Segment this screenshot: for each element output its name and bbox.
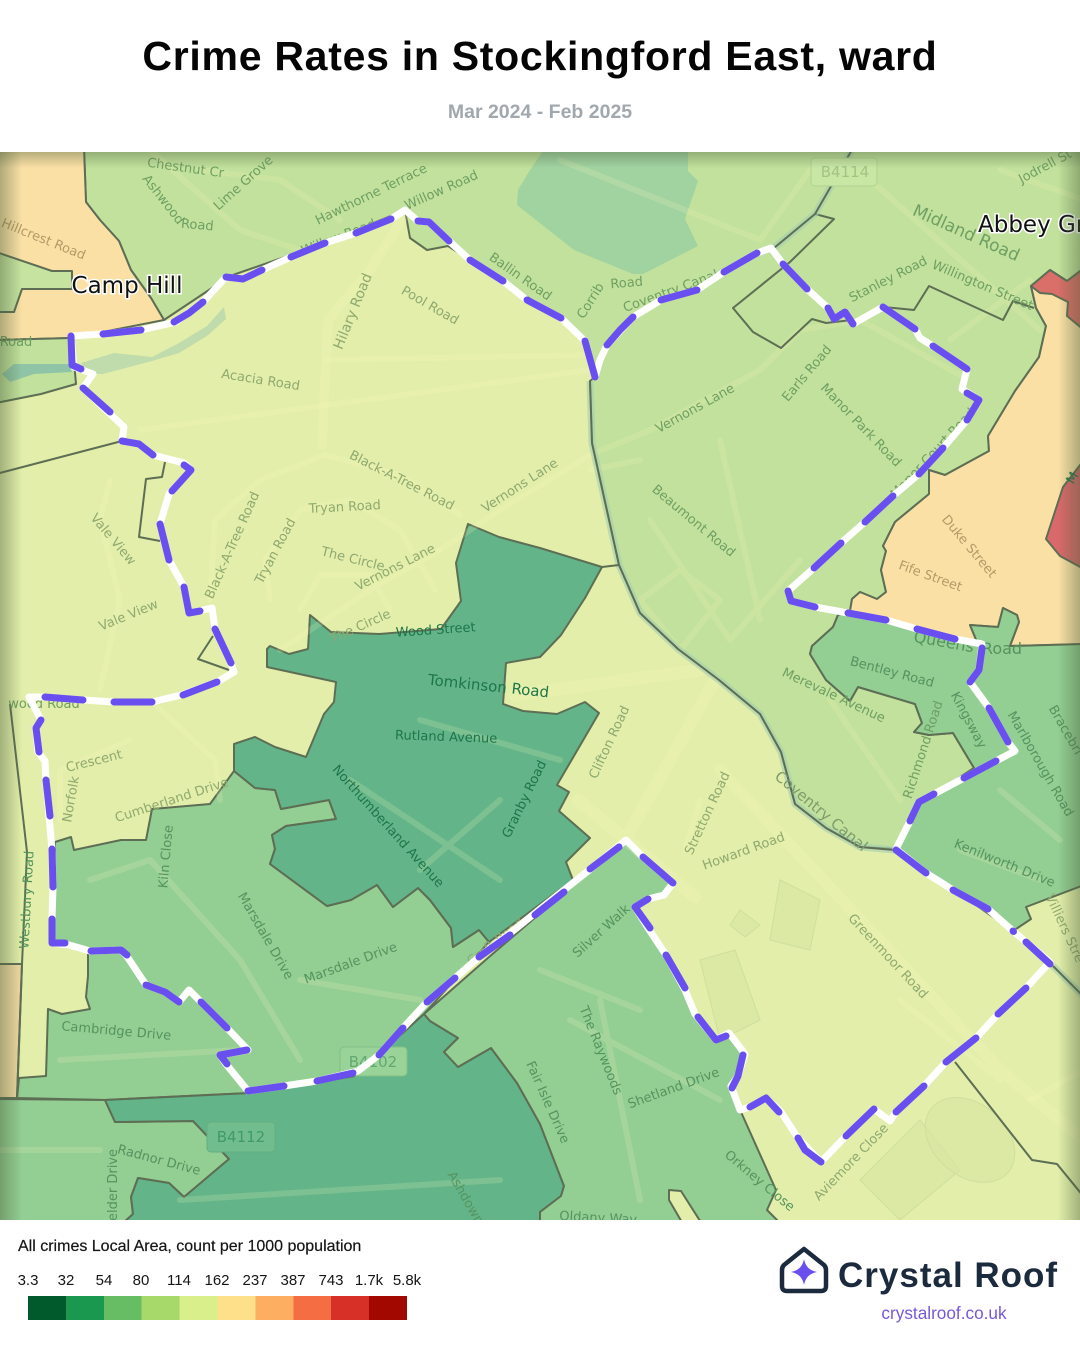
street labels: wood Road	[8, 697, 80, 712]
legend scale values: 237	[242, 1272, 268, 1289]
street labels: Tomkinson Road	[426, 671, 550, 701]
logo wordmark: Crystal Roof	[838, 1256, 1058, 1295]
street labels: Lime Grove	[211, 153, 276, 214]
title: Crime Rates in Stockingford East, ward	[142, 33, 938, 79]
base zone: light yellow-green	[0, 152, 1080, 1220]
website url: crystalroof.co.uk	[881, 1303, 1007, 1323]
zone: south-west green	[0, 1099, 229, 1224]
street labels: Rutland Avenue	[395, 728, 498, 747]
legend scale values: 1.7k	[355, 1272, 383, 1289]
street labels: Ashwood	[139, 172, 187, 228]
zone: bottom-left peach	[0, 964, 22, 1098]
street labels: The Raywoods	[575, 1003, 625, 1097]
street labels: Willington Street	[930, 258, 1035, 314]
street labels: Marsdale Drive	[302, 940, 399, 988]
legend scale values: 162	[204, 1272, 230, 1289]
street labels: Corrib	[574, 280, 608, 322]
street labels: Stanley Road	[847, 254, 930, 306]
street labels: Beaumont Road	[649, 482, 738, 560]
street labels: Road	[610, 275, 644, 292]
map: crime rate choropleth	[0, 152, 1080, 1220]
street labels: Black-A-Tree Road	[202, 490, 263, 601]
street labels: Ballin Road	[486, 250, 554, 304]
street labels: Coventry Canal	[771, 767, 871, 855]
street labels: Fife Street	[896, 558, 964, 595]
street labels: Oldany Way	[559, 1209, 638, 1228]
zone: Ashdown dark green	[105, 1014, 564, 1224]
zone: green west of ward	[0, 338, 76, 403]
zone: Tomkinson dark green	[234, 524, 602, 947]
street labels: Manor Park Road	[817, 381, 904, 470]
street labels: Road	[0, 335, 32, 350]
street labels: Stretton Road	[682, 770, 734, 857]
street labels: Kingsway	[947, 690, 989, 751]
water: brook	[2, 307, 226, 382]
street labels: The Circle	[327, 607, 393, 647]
street labels: Shetland Drive	[626, 1065, 722, 1112]
street labels: Silver Walk	[570, 901, 634, 961]
street labels: Hawthorne Terrace	[313, 161, 430, 228]
street labels: Croft Road	[464, 915, 527, 969]
street labels: Vernons Lane	[479, 456, 561, 516]
zone: Silver Walk green	[424, 840, 781, 1224]
legend title: All crimes Local Area, count per 1000 population	[18, 1238, 361, 1255]
street labels: Marlborough Road	[1004, 709, 1076, 819]
street labels: The Circle	[319, 544, 386, 575]
icon: house with star	[780, 1246, 828, 1294]
street labels: elder Drive	[106, 1149, 121, 1221]
zone: Marsdale green	[17, 771, 489, 1100]
legend scale values: 387	[280, 1272, 306, 1289]
street labels: Vale View	[97, 597, 161, 634]
legend scale values: 5.8k	[393, 1272, 421, 1289]
street labels: Queens	[912, 627, 976, 656]
street labels: Orkney Close	[721, 1148, 797, 1215]
street labels: Granby Road	[500, 758, 550, 841]
street labels: Coventry Canal	[621, 268, 720, 316]
street labels: Hilary Road	[331, 271, 376, 352]
street labels: Northumberland Avenue	[329, 762, 446, 891]
street labels: Midland Road	[909, 201, 1023, 266]
place label: Camp Hill: Camp Hill	[72, 273, 182, 299]
street labels: Aviemore Close	[811, 1121, 892, 1204]
ward boundary: purple dashes	[36, 219, 1050, 1162]
legend scale values: 32	[58, 1272, 74, 1289]
legend scale values: 54	[96, 1272, 112, 1289]
street labels: Earls Road	[780, 343, 835, 405]
zone: Queens Road and Kenilworth green	[810, 608, 1080, 931]
zone: strip west of Camp Hill	[0, 252, 72, 312]
zone: red upper	[1031, 268, 1080, 330]
zone: Camp Hill peach	[0, 148, 164, 340]
street labels: Road	[180, 217, 214, 234]
legend colour bar	[28, 1296, 407, 1320]
street labels: Ashdown	[444, 1169, 486, 1228]
legend scale values: 114	[167, 1272, 191, 1289]
street labels: Road	[982, 639, 1022, 658]
legend scale values: 80	[133, 1272, 149, 1289]
boundary lines between zones	[0, 214, 1080, 1197]
street labels: Black-A-Tree Road	[347, 448, 456, 514]
street labels: Fair Isle Drive	[522, 1059, 572, 1146]
ward boundary: white line	[29, 210, 1050, 1162]
canal	[540, 148, 1080, 997]
subtitle: date range: Mar 2024 - Feb 2025	[448, 101, 632, 123]
street labels: Tryan Road	[307, 498, 381, 517]
road number badges	[207, 158, 877, 1152]
street labels: Cumberland Drive	[113, 775, 231, 826]
street labels: Greenmoor Road	[845, 911, 931, 1002]
zone: east peach	[850, 286, 1080, 646]
street labels: Kenilworth Drive	[952, 837, 1057, 891]
street labels: Howard Road	[701, 830, 787, 874]
street labels: Tryan Road	[252, 516, 299, 588]
street labels: Cambridge Drive	[61, 1019, 172, 1044]
street labels: Hillcrest Road	[0, 216, 88, 263]
street labels: B4114	[821, 163, 869, 181]
streets: light road casing	[0, 150, 1080, 1200]
street labels: Clifton Road	[586, 704, 633, 781]
legend scale values	[18, 1272, 422, 1289]
street labels: Wood Street	[395, 620, 476, 641]
street labels: Vernons Lane	[353, 541, 438, 594]
street labels: Kiln Close	[156, 824, 177, 889]
street labels: Vernons Lane	[653, 381, 737, 437]
legend scale values: 3.3	[18, 1272, 38, 1289]
street labels: Marsdale Drive	[234, 890, 296, 982]
street labels: B4112	[217, 1128, 265, 1146]
street labels: Merevale Avenue	[780, 665, 887, 726]
zone: red lower	[1046, 460, 1080, 569]
legend	[18, 1238, 422, 1320]
street labels: Manor Court Road	[888, 406, 979, 502]
street labels: Chestnut Cr	[146, 156, 225, 181]
street labels: Richmond Road	[901, 699, 947, 801]
street labels: Pool Road	[398, 284, 461, 328]
school buildings and pitches	[700, 880, 1031, 1220]
lake: park	[517, 148, 698, 274]
logo: Crystal Roof	[780, 1246, 1058, 1295]
street labels: Acacia Road	[220, 367, 301, 394]
street labels: Vale View	[87, 511, 139, 569]
street labels: Crescent	[64, 747, 124, 776]
street labels: Jodrell St	[1015, 147, 1074, 188]
street labels: Norfolk	[60, 775, 83, 824]
map edge vignette	[0, 152, 1080, 1220]
street labels: Willow Road	[299, 217, 378, 259]
street labels: Willow Road	[403, 168, 481, 214]
street labels: Duke Street	[938, 512, 999, 581]
zone: north and Vernons green	[84, 148, 1080, 849]
street labels: Radnor Drive	[116, 1142, 202, 1179]
street labels: Bentley Road	[848, 654, 936, 691]
street labels: B4102	[349, 1053, 397, 1071]
legend scale values: 743	[318, 1272, 344, 1289]
street labels: Westbury Road	[17, 850, 38, 949]
